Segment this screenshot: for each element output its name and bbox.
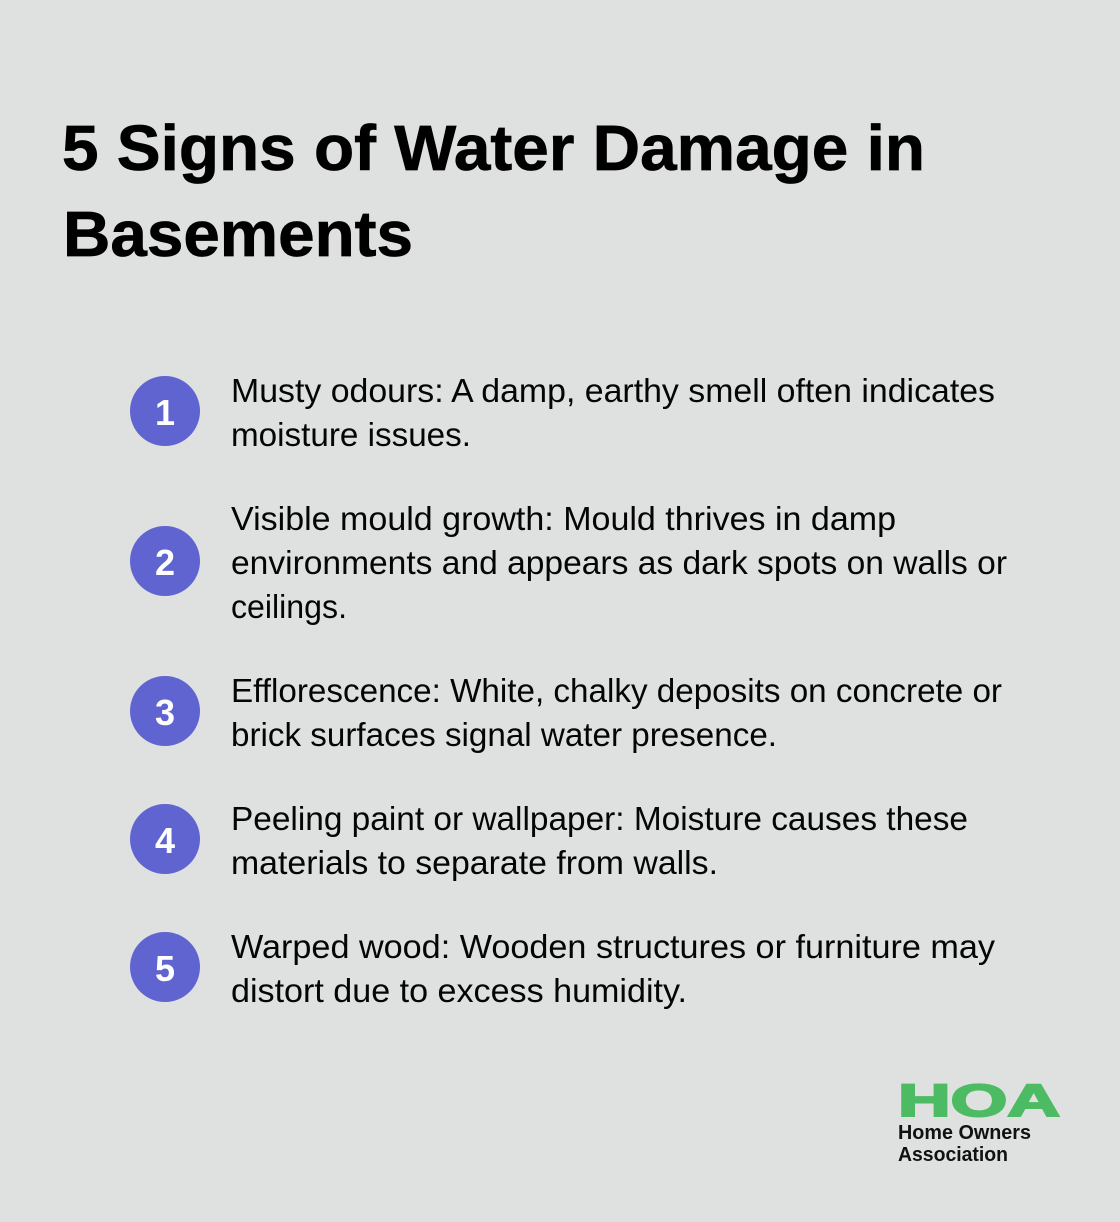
number badge 5 — [130, 932, 200, 1002]
list item 5 — [130, 928, 996, 1009]
text: efflorescence: Efflorescence: White, chalky deposits on concrete or — [231, 672, 1002, 709]
title: 5 Signs of Water Damage in — [62, 112, 925, 184]
logo mark: HOA — [898, 1075, 1060, 1126]
logo wordmark: Association — [898, 1144, 1008, 1166]
text: visible mould growth: Visible mould growth: Mould thrives in damp — [231, 500, 896, 537]
number badge 3: 3 — [155, 692, 175, 733]
text: peeling paint: Peeling paint or wallpaper: Moisture causes these — [231, 800, 968, 837]
text: musty odours: Musty odours: A damp, earthy smell often indicates — [231, 372, 995, 409]
list item 3 — [130, 672, 1002, 753]
logo: Home Owners Association — [898, 1075, 1060, 1166]
number badge 4 — [130, 804, 200, 874]
number badge 5: 5 — [155, 948, 175, 989]
number badge 4: 4 — [155, 820, 175, 861]
text: warped wood: distort due to excess humidity. — [231, 972, 687, 1009]
text: peeling paint — [231, 800, 968, 881]
text: visible mould growth: environments and appears as dark spots on walls or — [231, 544, 1007, 581]
list item 1 — [130, 372, 995, 453]
logo wordmark — [898, 1122, 1031, 1166]
text: musty odours — [231, 372, 995, 453]
text: visible mould growth: ceilings. — [231, 588, 347, 625]
number badge 2 — [130, 526, 200, 596]
text: warped wood — [231, 928, 996, 1009]
list item 4 — [130, 800, 968, 881]
number badge 2: 2 — [155, 542, 175, 583]
text: efflorescence: brick surfaces signal water presence. — [231, 716, 777, 753]
text: visible mould growth — [231, 500, 1007, 625]
logo wordmark: Home Owners — [898, 1122, 1031, 1144]
number badge 3 — [130, 676, 200, 746]
text: peeling paint: materials to separate from walls. — [231, 844, 718, 881]
number badge 1: 1 — [155, 392, 175, 433]
title: Basements — [63, 198, 413, 270]
title — [62, 112, 925, 270]
text: musty odours: moisture issues. — [231, 416, 471, 453]
text: warped wood: Warped wood: Wooden structures or furniture may — [231, 928, 996, 965]
text: efflorescence — [231, 672, 1002, 753]
number badge 1 — [130, 376, 200, 446]
list item 2 — [130, 500, 1007, 625]
